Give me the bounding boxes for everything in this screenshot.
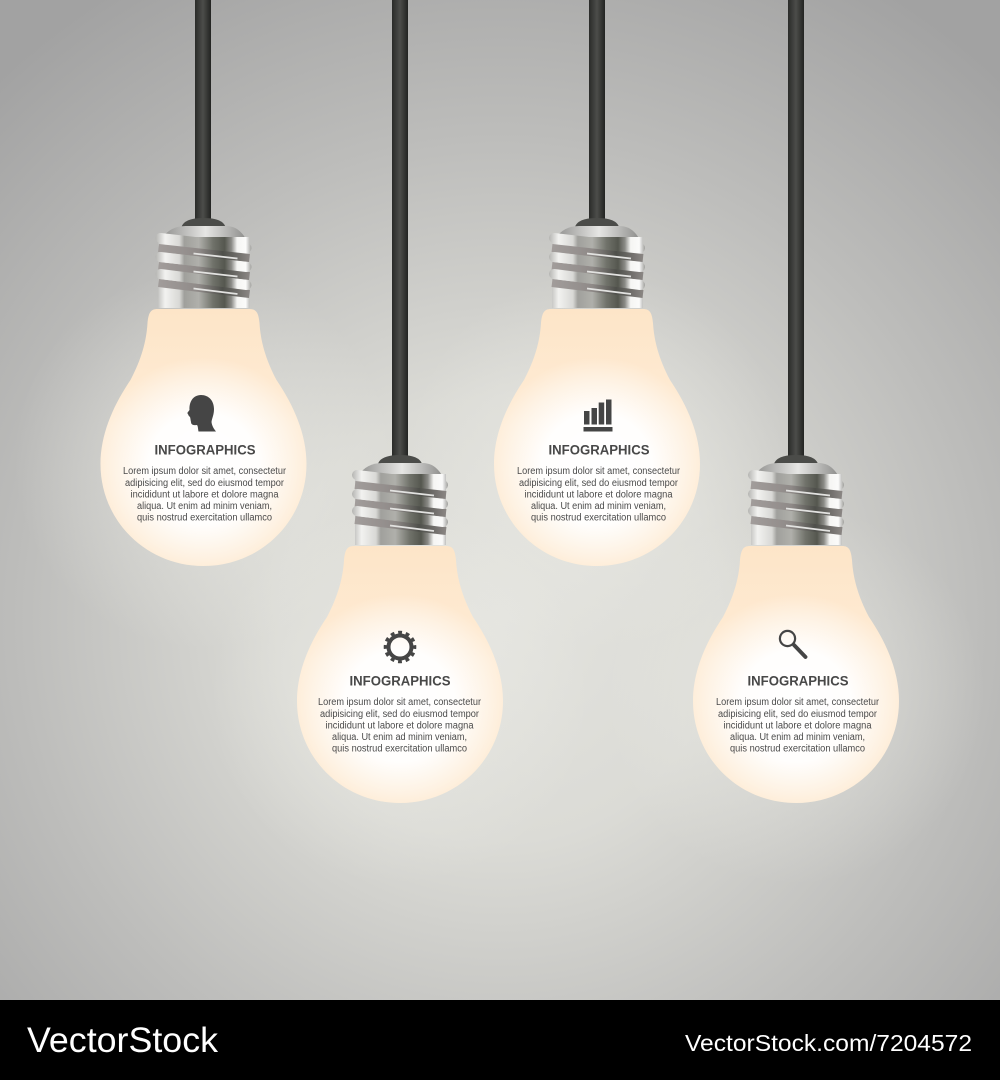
text block 3 <box>517 466 681 524</box>
text block 4: aliqua. Ut enim ad minim veniam, <box>730 732 865 743</box>
text block 2: incididunt ut labore et dolore magna <box>326 720 474 732</box>
glass 2 <box>297 546 503 803</box>
icon: magnifying glass <box>780 631 806 657</box>
text block 1: adipisicing elit, sed do eiusmod tempor <box>125 478 285 489</box>
footer bar <box>0 1000 1000 1080</box>
glow halos <box>13 270 986 885</box>
socket 4 <box>751 455 842 545</box>
panel: light bulb 2 <box>297 0 503 803</box>
text block 4: incididunt ut labore et dolore magna <box>724 720 872 732</box>
icon: head silhouette <box>187 395 216 432</box>
text block 1: aliqua. Ut enim ad minim veniam, <box>137 501 272 512</box>
text block 1: incididunt ut labore et dolore magna <box>130 490 279 500</box>
icon: gear <box>386 632 414 662</box>
heading 4: INFOGRAPHICS <box>748 674 848 688</box>
text block 4: quis nostrud exercitation ullamco <box>730 744 866 754</box>
text block 3: quis nostrud exercitation ullamco <box>531 512 667 524</box>
glass 3 <box>494 309 700 566</box>
text block 4: adipisicing elit, sed do eiusmod tempor <box>718 709 878 720</box>
glass 4 <box>693 546 899 803</box>
footer image id: VectorStock.com/7204572 <box>685 1030 972 1056</box>
panel: light bulb 4 <box>693 0 899 803</box>
cable 2 <box>392 0 408 457</box>
text block 3: aliqua. Ut enim ad minim veniam, <box>531 501 666 512</box>
heading 1: INFOGRAPHICS <box>154 442 256 458</box>
cable 4 <box>788 0 804 457</box>
text block 2: quis nostrud exercitation ullamco <box>332 744 468 754</box>
text block 3: adipisicing elit, sed do eiusmod tempor <box>519 478 679 489</box>
heading 2: INFOGRAPHICS <box>350 674 450 688</box>
panel: light bulb 1 <box>100 0 306 566</box>
text block 2: aliqua. Ut enim ad minim veniam, <box>332 732 467 743</box>
text block 1: Lorem ipsum dolor sit amet, consectetur <box>123 466 287 477</box>
socket 1 <box>158 218 250 308</box>
icon: bar chart <box>584 400 612 432</box>
text block 1: quis nostrud exercitation ullamco <box>137 512 273 524</box>
heading 3: INFOGRAPHICS <box>548 442 650 458</box>
footer logo text: VectorStock <box>27 1021 219 1060</box>
text block 3: incididunt ut labore et dolore magna <box>524 490 673 500</box>
glass 1 <box>100 309 306 566</box>
socket 3 <box>552 218 643 308</box>
text block 1 <box>123 466 287 524</box>
text block 4 <box>716 697 880 754</box>
text block 2 <box>318 697 482 754</box>
cable 3 <box>589 0 605 220</box>
text block 2: Lorem ipsum dolor sit amet, consectetur <box>318 697 482 708</box>
cable 1 <box>195 0 211 220</box>
text block 3: Lorem ipsum dolor sit amet, consectetur <box>517 466 681 477</box>
text block 4: Lorem ipsum dolor sit amet, consectetur <box>716 697 880 708</box>
text block 2: adipisicing elit, sed do eiusmod tempor <box>320 709 480 720</box>
panel: light bulb 3 <box>494 0 700 566</box>
socket 2 <box>355 455 446 545</box>
